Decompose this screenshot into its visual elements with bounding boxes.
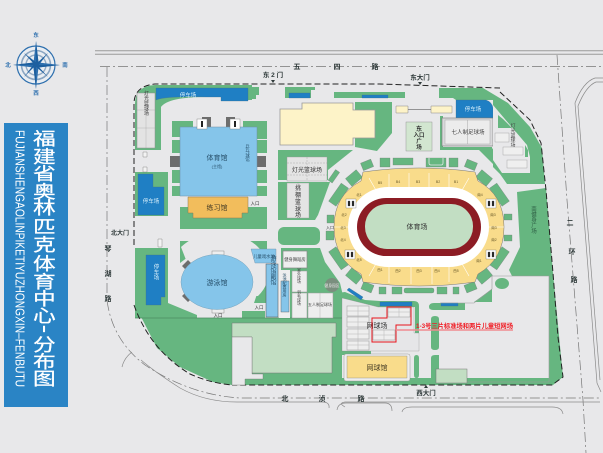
stand sector labels	[340, 180, 497, 273]
stand sector labels: B3	[416, 180, 420, 184]
east plaza outline	[440, 276, 549, 382]
gate labels: 西大门	[416, 388, 436, 397]
road names: 北	[282, 394, 288, 403]
stand sector labels: 西4	[434, 269, 440, 273]
main vertical title: -	[31, 325, 61, 333]
central-west basketball courts: 篮	[295, 198, 301, 206]
tennis hall: 网球馆	[366, 363, 388, 372]
gymnasium stairs	[170, 117, 266, 167]
cream building	[280, 103, 375, 145]
fitness room	[283, 251, 307, 268]
road names: 浈	[318, 394, 326, 403]
swimming annex: 游泳馆副馆	[269, 254, 276, 286]
east entrance plaza: 东	[416, 125, 422, 133]
road names: 环	[568, 248, 576, 256]
title panel	[4, 123, 68, 407]
stand sector labels: 北1	[356, 192, 362, 197]
east entrance plaza: 广	[416, 137, 422, 145]
road names: 五	[294, 63, 300, 71]
parking labels: 停车场	[465, 105, 482, 113]
stand sector labels: B5	[378, 181, 382, 185]
small courts: 羽毛球场	[296, 290, 302, 306]
central-west basketball courts: 挑	[295, 184, 301, 192]
tennis hall	[344, 354, 410, 381]
gymnasium label: 体育馆	[206, 153, 228, 162]
small courts: 室外球场	[296, 268, 302, 284]
stands	[334, 168, 504, 286]
compass rose: 西	[33, 90, 39, 97]
road names: 路	[358, 394, 364, 403]
table tennis hall label: 乒乓球馆	[245, 143, 250, 163]
site boundary dashes	[134, 84, 563, 385]
parking lots	[138, 88, 493, 306]
red highlight outline	[372, 307, 411, 342]
stadium entrance label: 入口	[326, 225, 334, 230]
fitness room: 健身舞蹈房	[284, 256, 306, 263]
stadium green blocks	[326, 158, 512, 294]
red callout: 1-3号三片标准场和两片儿童短网场	[416, 321, 513, 330]
main vertical title: 分布图	[33, 335, 56, 389]
entrance labels	[214, 305, 264, 319]
left light basketball courts	[137, 90, 155, 148]
tennis courts area	[342, 298, 419, 351]
pool equipment room	[279, 270, 290, 318]
east entrance plaza	[396, 106, 452, 151]
road names: 湖	[104, 269, 112, 278]
seven-a-side football pitch: 七人制足球场	[451, 128, 485, 136]
central-west basketball courts: 棚	[295, 191, 301, 199]
children's pool	[251, 249, 276, 263]
stand sector labels: B4	[396, 180, 400, 184]
large training field	[232, 323, 336, 385]
compass rose: 南	[62, 61, 68, 69]
east entrance plaza: 场	[416, 143, 422, 151]
central-west basketball courts: 灯光篮球场	[292, 166, 322, 174]
pool equipment room: 泳池配置用房	[282, 272, 288, 298]
gate labels	[111, 70, 436, 397]
stand sector labels: B2	[436, 180, 440, 184]
swimming annex	[266, 254, 278, 317]
parking labels: 停车场	[143, 197, 160, 205]
running track	[357, 198, 481, 256]
stand sector labels: 南1	[476, 258, 482, 263]
stand sector labels: 北5	[356, 257, 362, 262]
stand sector labels: 北4	[340, 237, 346, 242]
fitness garden	[324, 278, 340, 292]
stand sector labels: 南3	[491, 225, 497, 230]
panel: gymnasium: (主馆)	[212, 163, 223, 169]
entrance labels: 入口	[254, 305, 264, 311]
red callout	[396, 321, 513, 330]
main vertical title	[31, 129, 61, 389]
compass rose: 北	[5, 61, 11, 69]
seven-a-side football pitch	[442, 118, 493, 146]
panel: gymnasium	[170, 117, 266, 196]
gate labels: 北大门	[111, 229, 129, 237]
stand sector labels: 西1	[377, 268, 383, 272]
small courts: 五人制足球场	[308, 301, 332, 307]
east entrance plaza: 入口	[413, 132, 425, 139]
east light basketball courts: 灯光篮球场	[510, 122, 515, 148]
swimming hall: 游泳馆	[206, 278, 228, 287]
stadium	[334, 168, 504, 286]
fitness garden: 健身园区	[324, 283, 340, 288]
icons: gymnasium restrooms	[197, 119, 240, 129]
small gate posts	[143, 152, 162, 247]
central-west basketball courts: 球	[295, 205, 301, 213]
entrance labels: 入口	[214, 313, 222, 319]
canopy courts	[287, 183, 309, 218]
parking labels: 停车场	[180, 91, 197, 99]
road names	[104, 62, 578, 403]
compass rose	[5, 31, 68, 97]
practice hall	[188, 197, 248, 218]
south fitness plaza label: 南健身广场	[530, 205, 537, 235]
stand sector labels: 西3	[416, 269, 422, 273]
children's pool: 儿童戏水池	[253, 253, 275, 260]
entrance label: 入口	[250, 201, 260, 207]
tennis courts area: 网球场	[366, 321, 388, 330]
icons: stadium restrooms	[345, 199, 496, 259]
stand sector labels: 西2	[395, 269, 401, 273]
stand sector labels: B1	[454, 180, 458, 184]
football field	[365, 204, 473, 249]
main vertical title: 福建省奥林匹克体育中心	[33, 129, 56, 326]
pinyin vertical title: FUJIANSHENGAOLINPIKETIYUZHONGXIN–FENBUTU	[12, 130, 28, 387]
swimming hall	[181, 233, 269, 313]
road names: 二	[566, 220, 574, 227]
practice hall: 练习馆	[206, 203, 228, 212]
road network lines	[95, 51, 603, 453]
small courts	[292, 268, 333, 318]
gate labels: 东 2 门	[263, 70, 283, 79]
stand sector labels: 南2	[491, 237, 497, 242]
stand sector labels: 西5	[453, 269, 459, 273]
central-west basketball courts: 场	[295, 211, 301, 219]
gate labels: 东大门	[410, 72, 430, 82]
stand sector labels: 北3	[340, 225, 346, 230]
road names: 四	[334, 63, 340, 71]
road names: 路	[104, 294, 112, 303]
small west green field	[436, 369, 467, 383]
stand sector labels: 北2	[341, 212, 347, 217]
compass rose: 东	[33, 31, 39, 39]
stand sector labels: 南3	[490, 212, 496, 217]
road names: 路	[570, 275, 578, 284]
road names: 琴	[104, 245, 112, 253]
site green grounds	[135, 85, 563, 385]
green division line	[135, 317, 342, 319]
road names: 路	[372, 62, 378, 71]
central-west basketball courts	[287, 157, 327, 219]
stadium: 体育场	[406, 222, 428, 231]
parking labels: 停车场	[152, 263, 159, 282]
parking labels	[143, 91, 482, 282]
stand sector labels: 南4	[477, 192, 483, 197]
left light basketball courts: 灯光篮球场	[143, 90, 149, 117]
east light basketball courts	[493, 105, 530, 173]
